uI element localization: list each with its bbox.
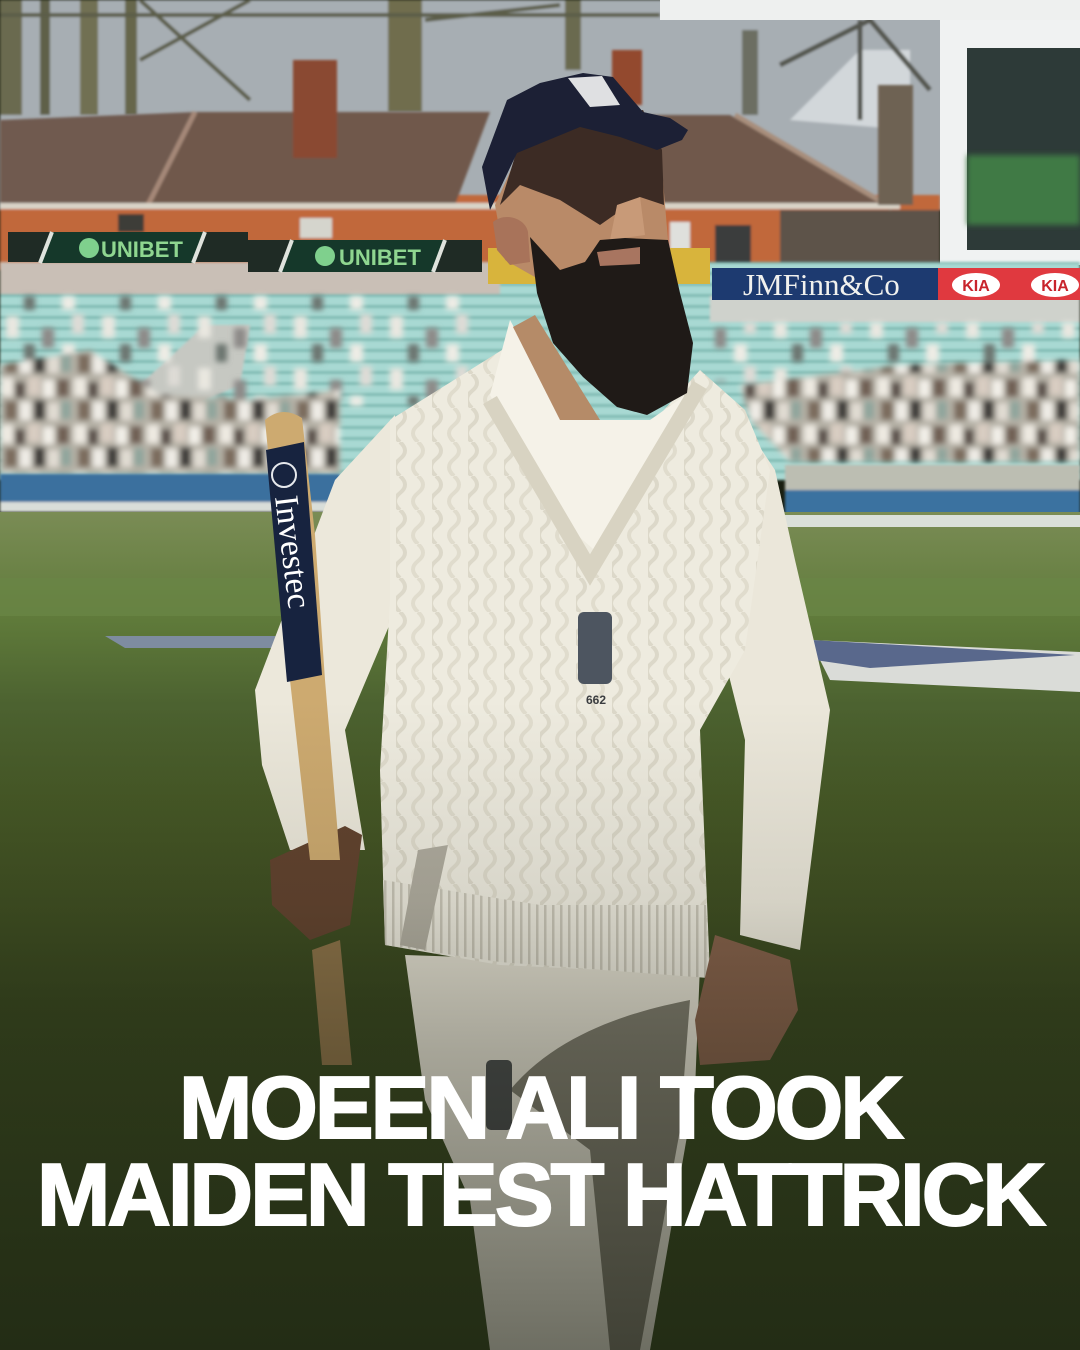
fold shadow — [400, 845, 448, 950]
big screen — [660, 0, 1080, 265]
houses with red-tiled roofs — [0, 50, 940, 270]
seating stands — [0, 262, 1080, 480]
legs — [405, 955, 700, 1350]
lips — [597, 247, 640, 266]
stump: Investec — [267, 493, 318, 610]
advertising boards: Unibet: UNIBET — [339, 245, 421, 270]
nose highlight — [610, 197, 645, 240]
sky and floodlight gantry — [0, 0, 1080, 210]
outfield grass — [0, 512, 1080, 1350]
upper face in cap shadow — [500, 110, 664, 225]
right hand — [695, 935, 798, 1065]
title line 1: MOEEN ALI TOOK — [179, 1058, 901, 1157]
advertising boards: JM Finn and Kia: KIA — [962, 278, 990, 295]
neck — [513, 315, 600, 420]
collar and shirt — [490, 320, 700, 555]
shadow on trousers — [510, 1000, 690, 1350]
sweater crest — [578, 612, 612, 707]
sweater hem — [383, 880, 708, 978]
left arm (viewer) — [255, 415, 400, 850]
sweater crest: 662 — [586, 693, 606, 707]
advertising boards: JM Finn and Kia — [488, 248, 1080, 302]
advertising boards: JM Finn and Kia: JMFinn&Co — [743, 267, 900, 302]
left hand holding stump — [270, 826, 362, 940]
boundary boards — [0, 465, 1080, 518]
right arm (viewer) — [715, 410, 830, 950]
trouser crest — [486, 1060, 512, 1130]
advertising boards: JM Finn and Kia: KIA — [1041, 278, 1069, 295]
stump — [265, 412, 352, 1065]
bottom dark gradient — [0, 700, 1080, 1350]
cap crest — [568, 76, 620, 107]
player — [255, 73, 830, 1350]
title line 2: MAIDEN TEST HATTRICK — [37, 1145, 1043, 1244]
face — [495, 145, 668, 300]
beard — [530, 237, 693, 415]
sweater — [380, 345, 770, 975]
crowd — [0, 296, 1080, 474]
advertising boards: Unibet — [8, 232, 482, 272]
ear — [493, 217, 530, 265]
cap — [482, 73, 688, 210]
advertising boards: Unibet: UNIBET — [101, 237, 183, 262]
